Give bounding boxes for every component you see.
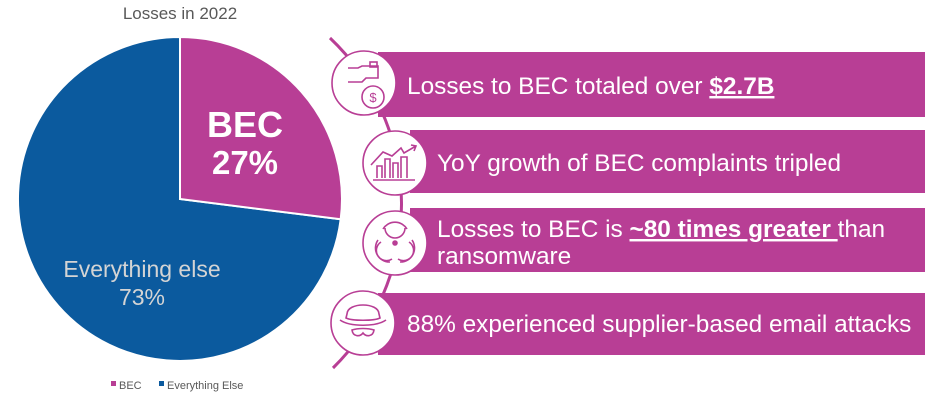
pie chart [18, 37, 342, 361]
legend: BEC [119, 380, 142, 392]
connector arc [330, 38, 401, 368]
pie label: BEC: 27% [212, 144, 278, 181]
pie label: BEC [207, 104, 283, 181]
legend: Everything Else [167, 380, 243, 392]
legend [111, 380, 243, 392]
chart title: Losses in 2022 [123, 4, 237, 23]
bar 1: Losses to BEC totaled over $2.7B [407, 73, 774, 100]
bar 3 [410, 208, 925, 272]
bar 4: 88% experienced supplier-based email attacks [407, 311, 911, 338]
bar 4 [378, 293, 925, 355]
pie label: everything else [63, 256, 221, 310]
bar 3: Losses to BEC is ~80 times greater than [437, 216, 885, 243]
bar 1 [378, 52, 925, 117]
icon: money bag hand [332, 51, 396, 115]
pie label: everything else: 73% [119, 284, 165, 310]
bar 2 [410, 130, 925, 193]
icon: money bag hand: $ [369, 90, 377, 105]
icon: spy hat mask [331, 291, 395, 355]
bar 3: ransomware [437, 243, 571, 270]
pie label: BEC: BEC [207, 104, 283, 145]
icon: growth chart [363, 131, 427, 195]
bar 2: YoY growth of BEC complaints tripled [437, 150, 841, 177]
icon: biohazard [363, 211, 427, 275]
pie label: everything else: Everything else [63, 256, 221, 282]
